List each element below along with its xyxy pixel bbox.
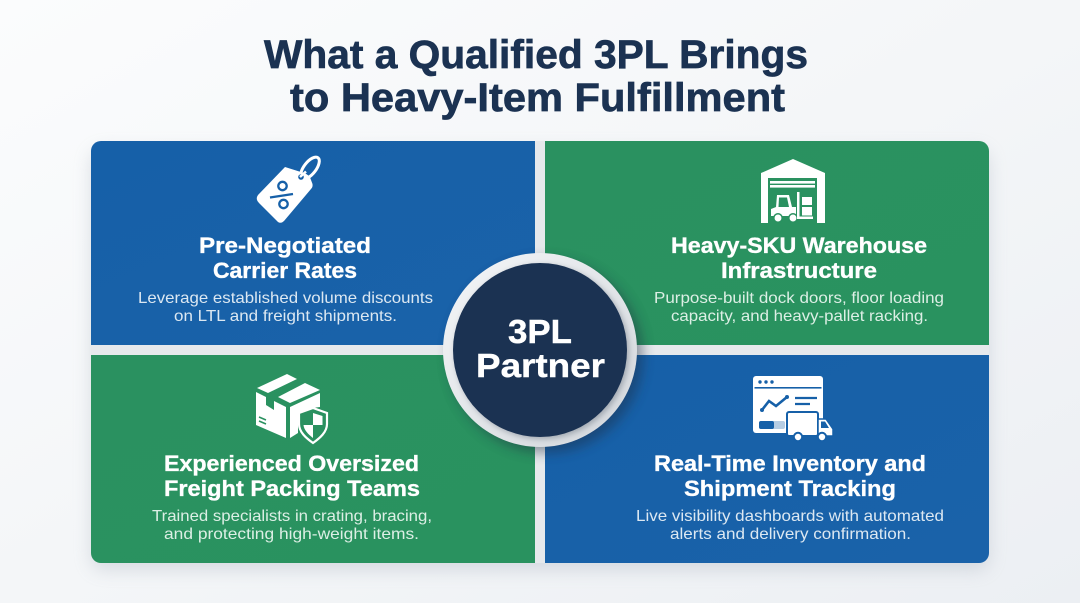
heading: Infrastructure	[721, 258, 877, 283]
heading	[199, 233, 371, 283]
heading	[671, 233, 927, 283]
heading	[654, 451, 926, 501]
heading	[164, 451, 420, 501]
heading: Experienced Oversized	[164, 451, 419, 476]
body text: Leverage established volume discounts	[138, 290, 433, 307]
panel: heavy-SKU warehouse infrastructure	[545, 141, 989, 345]
title: to Heavy-Item Fulfillment	[290, 76, 785, 120]
heading: Carrier Rates	[213, 258, 357, 283]
icon: warehouse with forklift	[761, 159, 825, 223]
body text	[138, 290, 433, 325]
heading: Heavy-SKU Warehouse	[671, 233, 927, 258]
panel: experienced oversized freight packing teams	[91, 355, 535, 563]
panel: pre-negotiated carrier rates	[91, 141, 535, 345]
icon: dashboard with truck	[753, 376, 833, 441]
title	[264, 33, 808, 120]
heading: Shipment Tracking	[684, 476, 896, 501]
body text	[654, 290, 944, 325]
heading: Freight Packing Teams	[164, 476, 420, 501]
body text: capacity, and heavy-pallet racking.	[671, 308, 928, 325]
heading: Real-Time Inventory and	[654, 451, 926, 476]
icon: box with shield	[256, 374, 327, 443]
icon: price tag	[257, 154, 323, 223]
body text: Purpose-built dock doors, floor loading	[654, 290, 944, 307]
body text	[152, 508, 432, 543]
body text: Live visibility dashboards with automated	[636, 508, 944, 525]
body text: and protecting high-weight items.	[164, 526, 419, 543]
panel: real-time inventory and shipment tracking	[545, 355, 989, 563]
heading: Pre-Negotiated	[199, 233, 371, 258]
body text: alerts and delivery confirmation.	[670, 526, 911, 543]
body text	[636, 508, 944, 543]
body text: Trained specialists in crating, bracing,	[152, 508, 432, 525]
body text: on LTL and freight shipments.	[174, 308, 397, 325]
center circle: 3PL Partner: Partner	[476, 347, 605, 384]
title: What a Qualified 3PL Brings	[264, 33, 808, 77]
center circle: 3PL Partner	[443, 253, 643, 453]
center circle: 3PL Partner: 3PL	[508, 313, 572, 350]
